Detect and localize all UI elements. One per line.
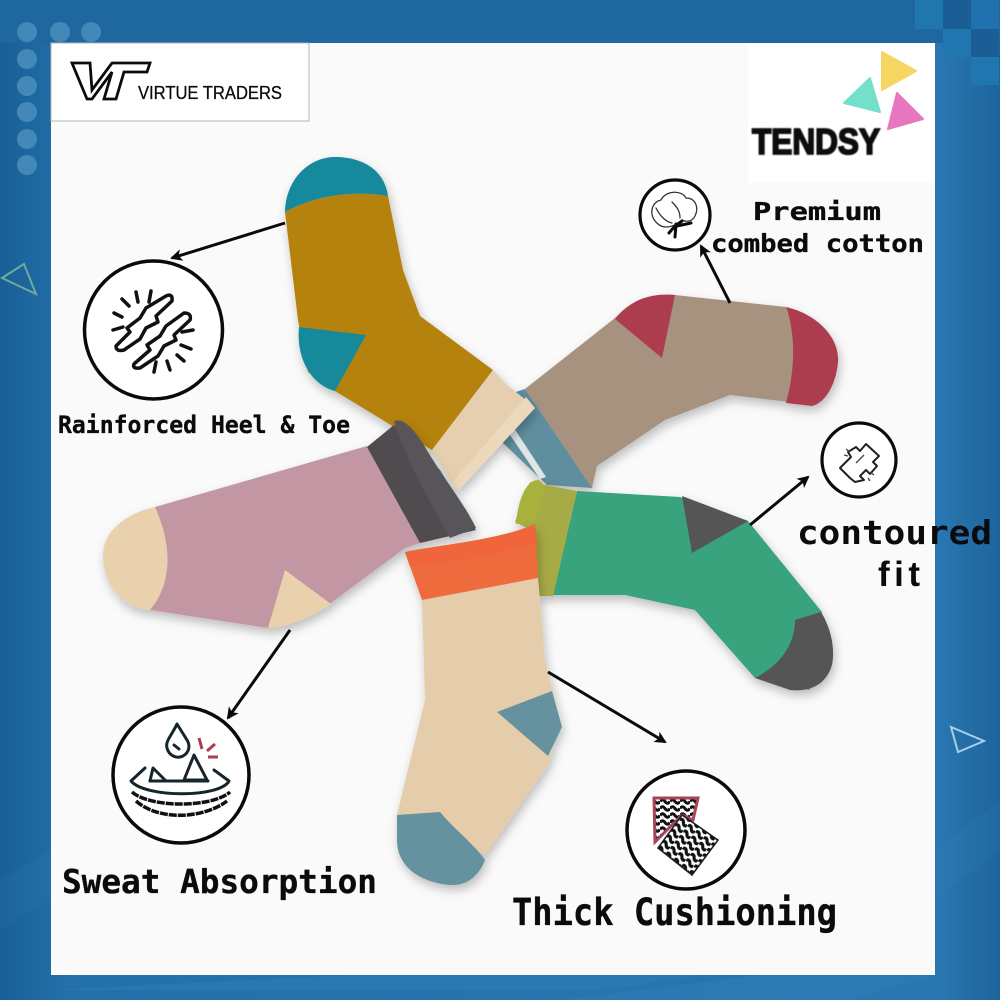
icon: cushions <box>627 771 745 889</box>
logo: Virtue Traders: VIRTUE TRADERS <box>138 83 282 103</box>
icon: reinforced chain <box>84 261 222 399</box>
sock: mauve and cream <box>103 421 476 628</box>
label: contoured fit: contoured <box>797 513 992 552</box>
sock: taupe and red <box>502 295 838 488</box>
icon: sweat absorption <box>113 707 249 843</box>
sock: cream and blue <box>397 524 562 885</box>
label: premium combed cotton: combed cotton <box>711 229 924 258</box>
logo: Virtue Traders <box>51 43 309 121</box>
arrow: to contoured fit <box>750 477 808 525</box>
label: sweat absorption: Sweat Absorption <box>62 862 377 901</box>
label: contoured fit <box>797 513 992 594</box>
arrow: to cotton <box>701 246 730 303</box>
label: premium combed cotton: Premium <box>753 197 881 226</box>
decorative triangle left <box>2 264 36 294</box>
label: contoured fit: fit <box>878 555 920 594</box>
sock: mustard and teal <box>285 157 535 491</box>
label: reinforced heel and toe: Rainforced Heel & Toe <box>58 411 350 439</box>
icon: contoured fit puzzle <box>822 423 896 497</box>
label: thick cushioning: Thick Cushioning <box>512 891 837 934</box>
sock: green and charcoal <box>515 480 833 690</box>
decorative triangle right <box>951 727 984 752</box>
logo: Tendsy: TENDSY <box>752 121 880 162</box>
logo: Tendsy <box>748 43 935 183</box>
arrow: to thick cushioning <box>548 672 665 742</box>
arrow: to reinforced <box>172 223 285 258</box>
arrow: to sweat absorption <box>228 630 290 718</box>
icon: cotton <box>640 180 710 250</box>
label: premium combed cotton <box>711 197 924 258</box>
